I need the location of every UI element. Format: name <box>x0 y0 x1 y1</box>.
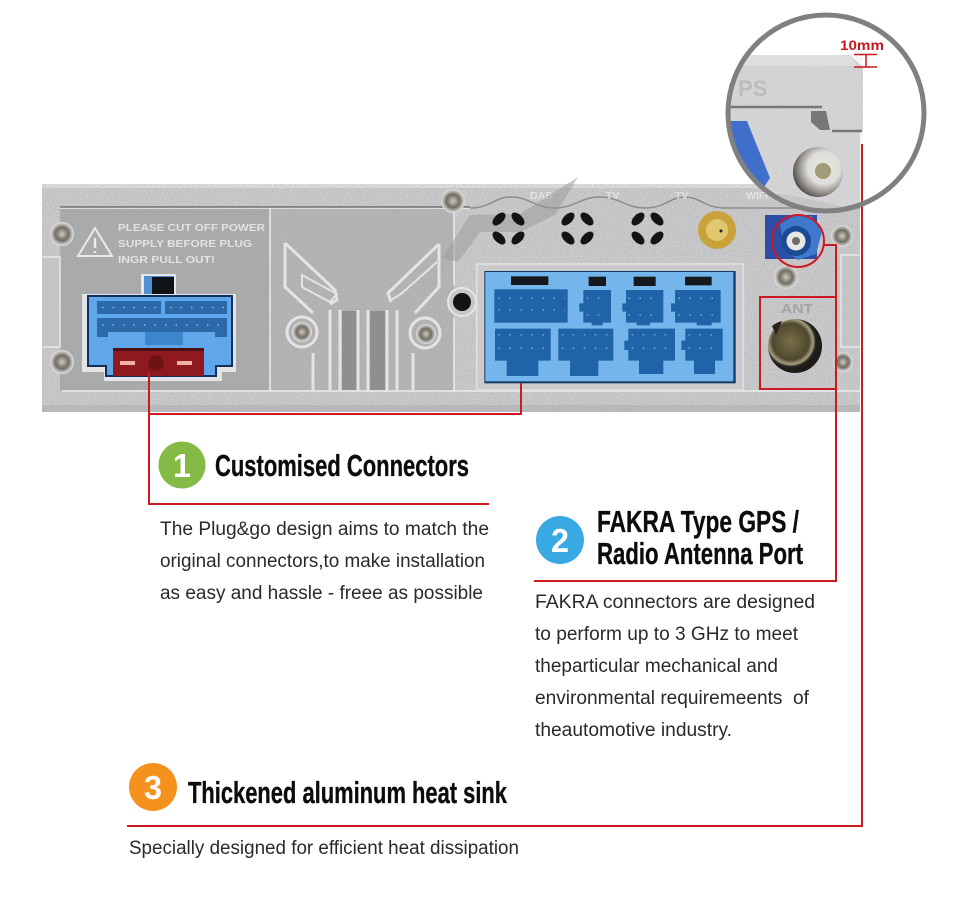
body 2: FAKRA connectors are designed <box>535 592 815 613</box>
warning label <box>78 222 265 266</box>
badge 3 <box>129 763 177 811</box>
port: gold SMA connector <box>698 211 736 249</box>
badge 1 <box>158 442 206 488</box>
watermark logo <box>442 177 578 262</box>
body 2: environmental requiremeents of <box>535 688 810 709</box>
line to heading 3 <box>127 144 862 826</box>
section 2: FAKRA port <box>535 504 815 741</box>
wave ridge and labels <box>470 190 860 208</box>
screws <box>50 189 853 374</box>
section 3: heat sink <box>129 763 519 859</box>
embossed logo on chassis <box>285 243 476 390</box>
leader lines <box>127 144 862 826</box>
body 2: theautomotive industry. <box>535 720 732 741</box>
body 1: The Plug&go design aims to match the <box>160 519 489 540</box>
warning label: SUPPLY BEFORE PLUG <box>118 238 252 250</box>
connector: blue socket block <box>477 264 743 390</box>
body 1: original connectors,to make installation <box>160 551 485 572</box>
section 1: customised connectors <box>158 442 489 604</box>
badge 2 <box>536 516 584 564</box>
heading 2: FAKRA Type GPS / <box>597 504 799 539</box>
magnifier inset: PS <box>738 76 767 101</box>
warning label: PLEASE CUT OFF POWER <box>118 222 265 234</box>
hole cluster 2 <box>559 210 596 247</box>
hole cluster 1 <box>490 210 527 247</box>
body 3: Specially designed for efficient heat dissipation <box>129 838 519 859</box>
hole cluster 3 <box>629 210 666 247</box>
wave ridge and labels: TV <box>606 190 619 202</box>
badge 3: 3 <box>144 769 162 806</box>
body 2 <box>535 592 815 741</box>
fuse <box>113 348 204 376</box>
port: ANT socket <box>768 301 822 373</box>
port: FAKRA blue connector <box>765 215 822 260</box>
heading 2: Radio Antenna Port <box>597 536 803 571</box>
body 2: to perform up to 3 GHz to meet <box>535 624 799 645</box>
connector: ISO harness and fuse <box>82 274 236 381</box>
heading 2 <box>597 504 803 571</box>
10mm dimension <box>840 38 884 67</box>
warning label: INGR PULL OUT! <box>118 254 215 266</box>
heading 1: Customised Connectors <box>215 448 469 483</box>
wave ridge and labels: WIFI <box>746 190 768 202</box>
badge 1: 1 <box>173 447 191 484</box>
wave ridge and labels: TV <box>675 190 688 202</box>
heading 3: Thickened aluminum heat sink <box>188 775 508 810</box>
FAKRA highlight <box>772 215 824 267</box>
line to heading 2 <box>534 245 836 581</box>
ports: round antenna holes <box>490 210 666 247</box>
panel: rear metal chassis <box>42 177 860 412</box>
10mm dimension: 10mm <box>840 38 884 53</box>
line to socket block <box>149 383 521 414</box>
body 1 <box>160 519 489 604</box>
ANT highlight <box>760 297 836 389</box>
wave ridge and labels: DAB <box>530 190 553 202</box>
body 1: as easy and hassle - freee as possible <box>160 583 483 604</box>
body 2: theparticular mechanical and <box>535 656 778 677</box>
port: ANT socket: ANT <box>781 301 813 316</box>
badge 2: 2 <box>551 522 569 559</box>
line to heading 1 <box>149 372 489 504</box>
magnifier inset <box>720 15 924 215</box>
